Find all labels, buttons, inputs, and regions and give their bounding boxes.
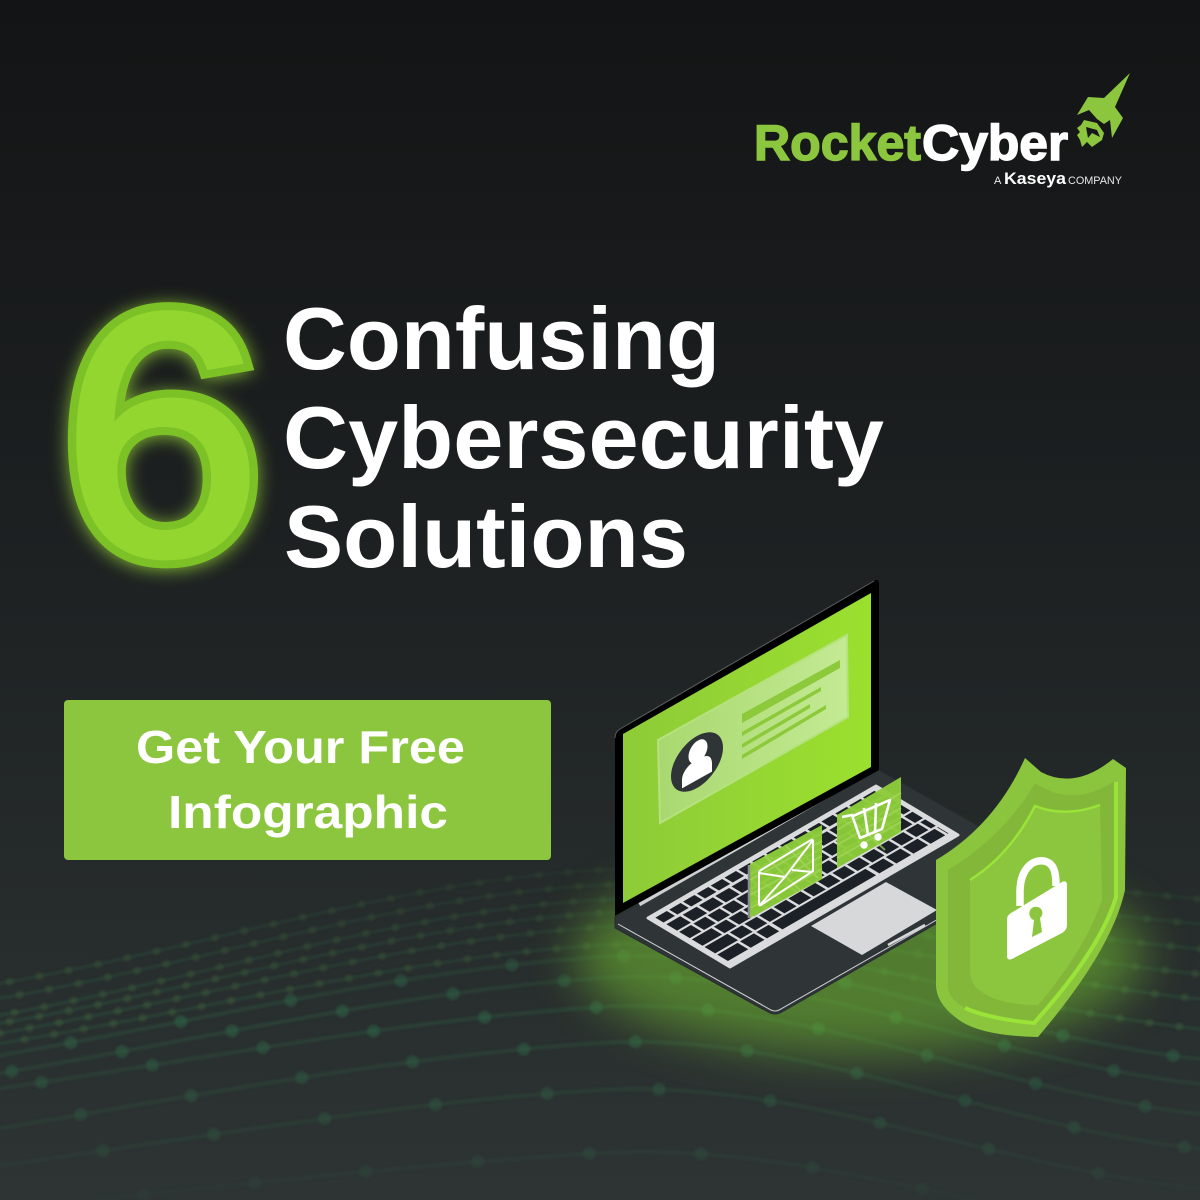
lid bezel xyxy=(615,580,879,916)
shield rim xyxy=(948,782,1117,1023)
shield face highlight xyxy=(970,805,1100,880)
panel grid xyxy=(837,793,901,858)
button label line 1: Get Your Free xyxy=(136,721,465,773)
glow under laptop and shield xyxy=(575,857,1145,1053)
keys xyxy=(659,792,943,958)
avatar xyxy=(671,722,723,802)
logo tagline: Kaseya xyxy=(1004,169,1067,188)
logo tagline: COMPANY xyxy=(1068,175,1123,187)
icon: envelope xyxy=(759,840,813,905)
numeral ring: 6 xyxy=(61,242,262,627)
card text lines xyxy=(742,660,840,759)
email panel xyxy=(749,825,822,918)
keyboard plate xyxy=(648,786,958,967)
keyboard xyxy=(648,786,958,967)
lid edge highlight xyxy=(615,581,874,738)
button: get infographic xyxy=(64,700,551,860)
avatar circle xyxy=(671,722,723,802)
button background xyxy=(64,700,551,860)
title xyxy=(283,289,884,586)
illustration: shield xyxy=(936,758,1126,1037)
big numeral 6 xyxy=(61,242,262,629)
profile card xyxy=(658,635,848,823)
title line 3: Solutions xyxy=(284,487,688,586)
title line 1: Confusing xyxy=(283,289,720,388)
shield face xyxy=(970,805,1102,1005)
logo wordmark: Rocket xyxy=(754,115,921,171)
laptop base xyxy=(615,770,1030,1014)
cart panel xyxy=(837,777,901,868)
logo: RocketCyber xyxy=(754,73,1130,188)
panel grid xyxy=(750,841,822,908)
avatar person xyxy=(682,733,712,788)
base highlight edge xyxy=(618,918,940,1011)
logo wordmark: Cyber xyxy=(922,115,1068,171)
icon: rocket xyxy=(1077,73,1130,147)
cart panel backing xyxy=(837,777,901,868)
logo tagline: A xyxy=(994,175,1002,187)
trackpad notch xyxy=(888,925,925,945)
lock shackle xyxy=(1020,861,1056,906)
icon: cart xyxy=(842,800,890,847)
panel shadow edge xyxy=(748,865,750,918)
email panel backing xyxy=(750,825,822,918)
numeral glow: 6 xyxy=(61,244,262,629)
trackpad xyxy=(811,882,937,955)
shield bright edge xyxy=(965,782,1116,1023)
illustration: laptop xyxy=(615,580,1030,1014)
hinge strip xyxy=(639,781,853,904)
screen xyxy=(623,593,871,903)
lock body xyxy=(1007,881,1067,960)
background: wave mesh xyxy=(0,867,1200,1200)
title line 2: Cybersecurity xyxy=(283,388,884,487)
keyhole xyxy=(1029,907,1042,937)
shield outer xyxy=(936,758,1126,1037)
button label line 2: Infographic xyxy=(168,786,448,838)
card panel xyxy=(658,635,848,823)
numeral face: 6 xyxy=(61,242,262,627)
icon: padlock xyxy=(1007,861,1067,960)
